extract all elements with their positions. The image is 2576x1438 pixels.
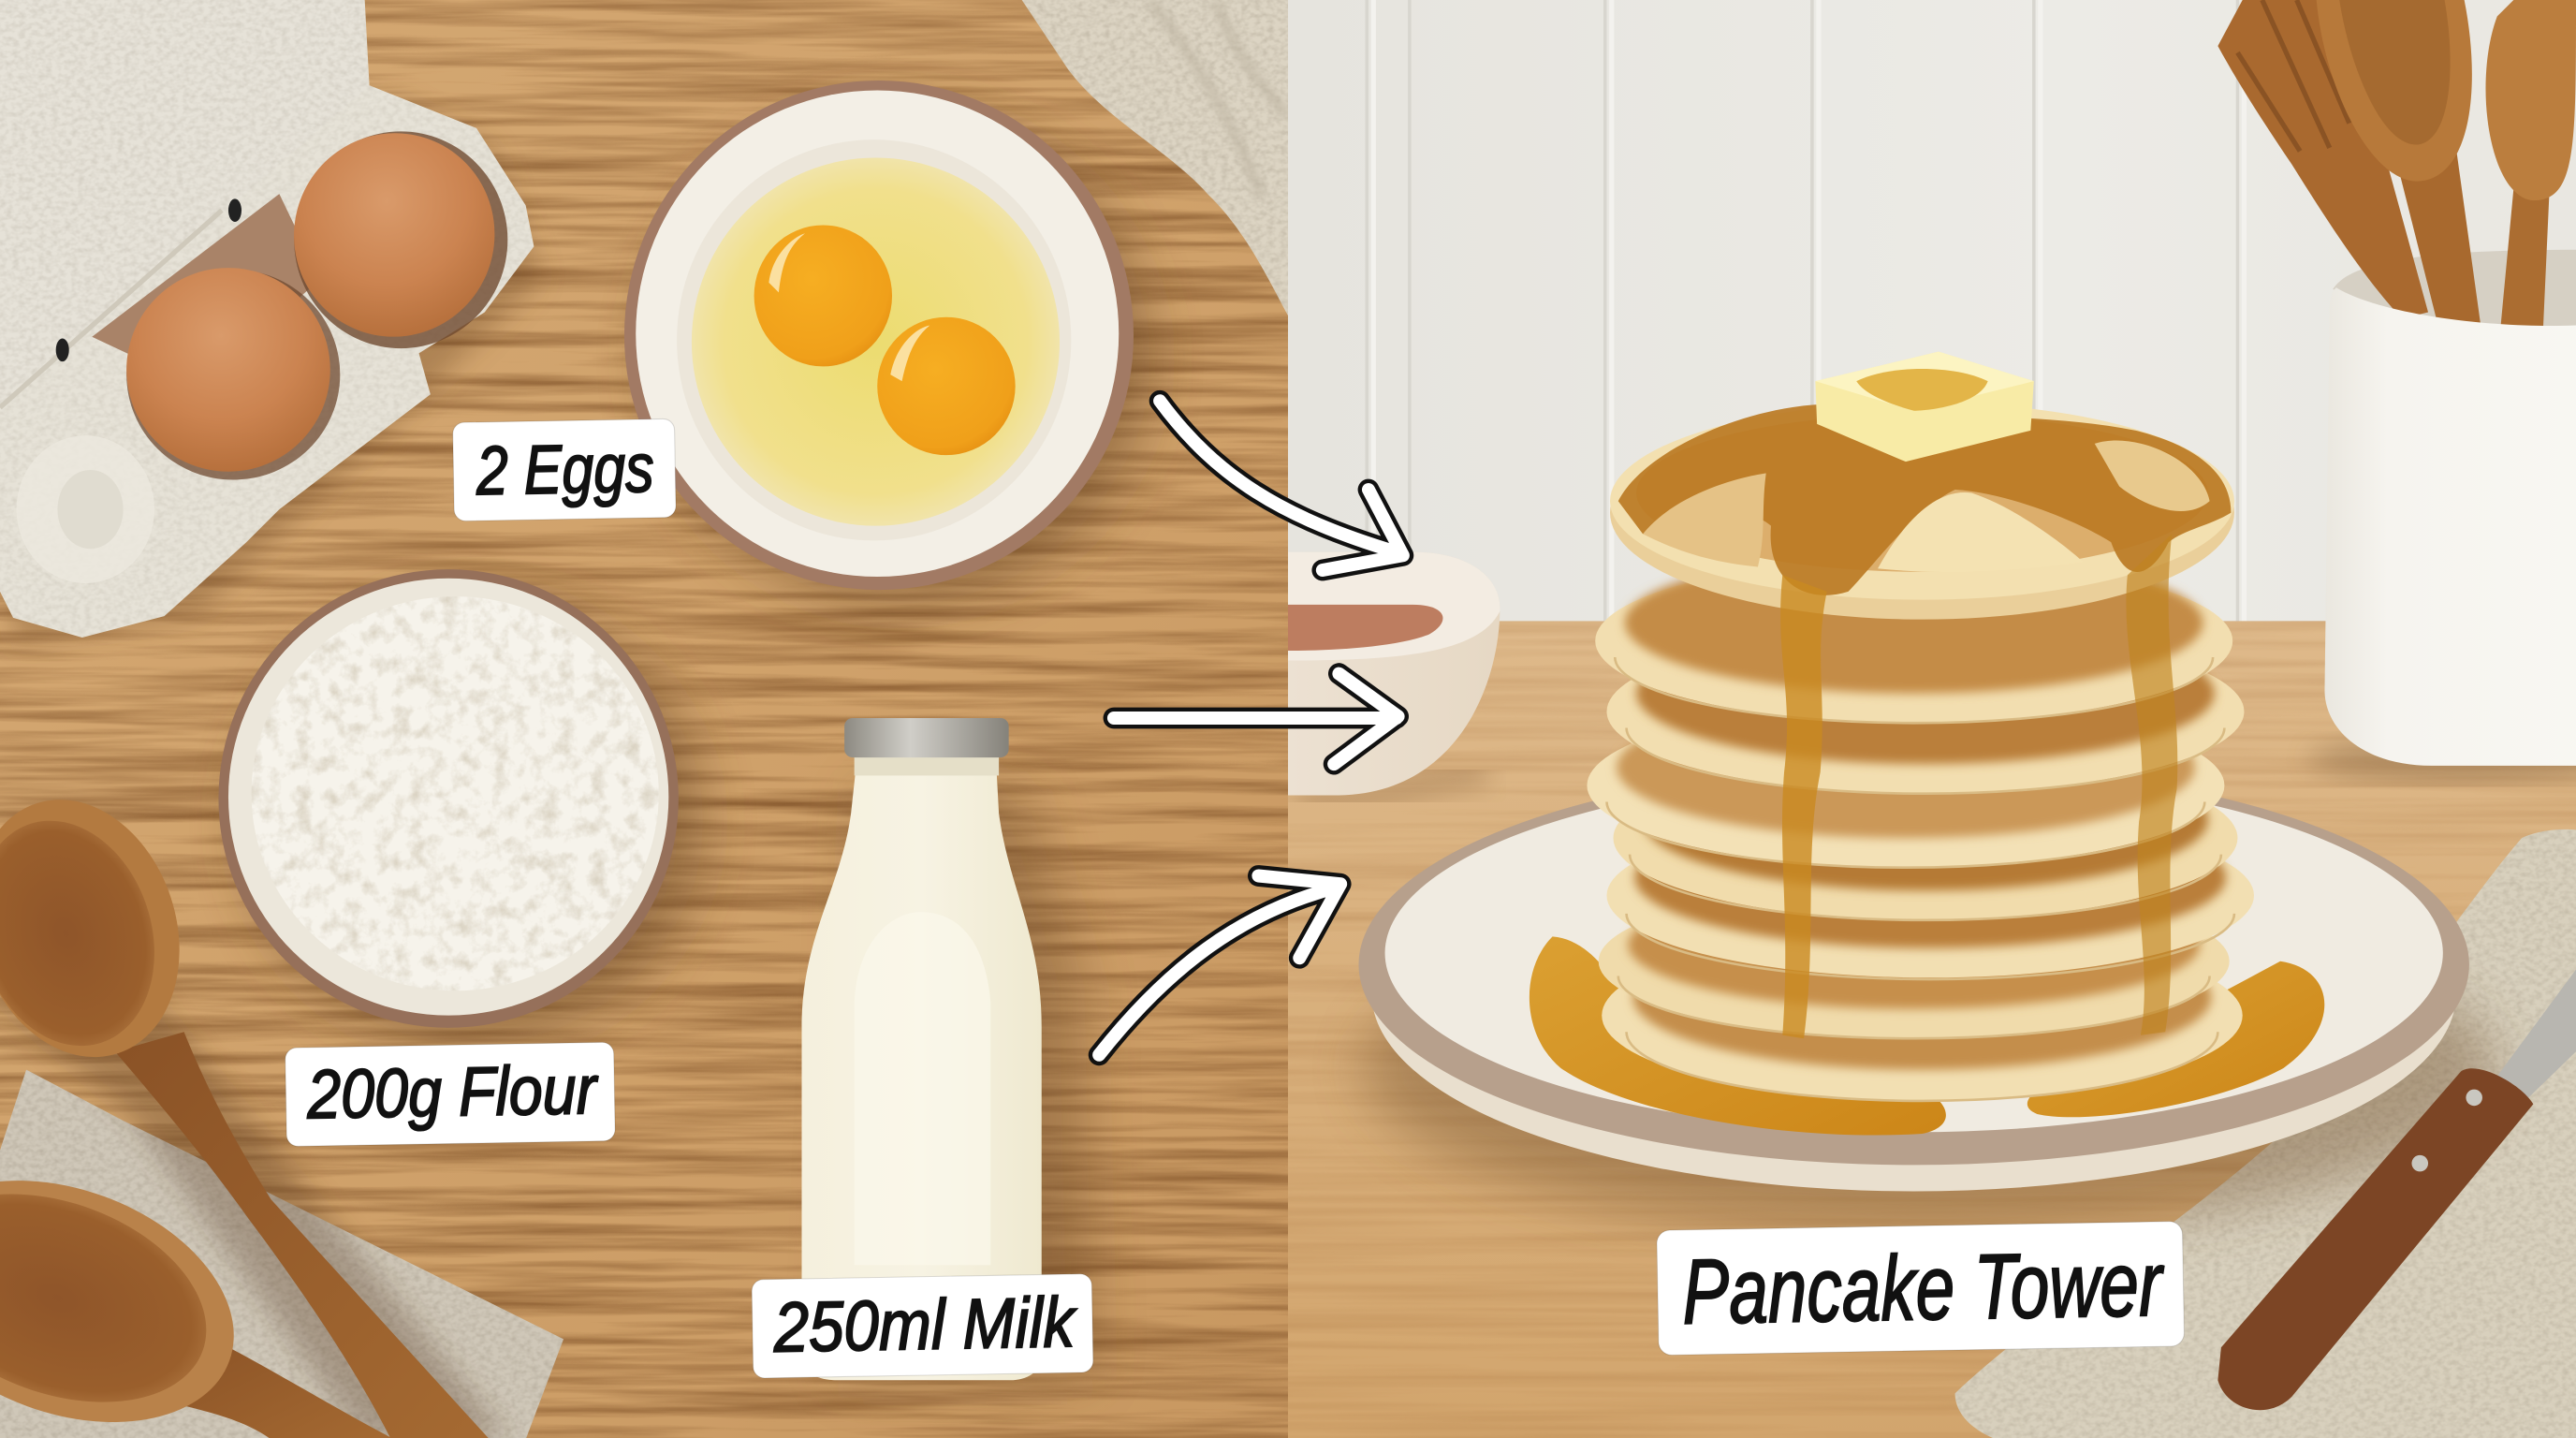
icon: wooden spoon, centre [2317,0,2481,326]
pancake stack [1587,403,2254,1101]
pancake 8: top [1610,403,2234,620]
syrup drip right [2126,534,2177,1035]
shadow: egg bowl [651,111,1150,605]
icon: white utensil cup [2324,287,2576,766]
syrup pool: right [2027,961,2324,1117]
shadow: cup [2308,736,2576,782]
icon: wooden spoon, right [2485,0,2576,329]
label: 2 Eggs: 2 Eggs [475,429,654,509]
cloth: top right [1022,0,1288,315]
icon: butter pat [1815,352,2034,462]
cup interior [2333,250,2576,337]
label: 2 Eggs [453,418,676,521]
syrup on top [1618,404,2231,595]
label: Pancake Tower [1657,1221,2185,1356]
label: Pancake Tower: Pancake Tower [1681,1232,2166,1343]
panel: ingredients on wood table [0,0,1288,1438]
icon: egg carton [0,0,542,644]
wood background [0,0,1288,1438]
icon: yolk 2 [877,317,1016,455]
icon: syrup bowl [1288,552,1500,800]
pancake 5 [1587,697,2224,868]
icon: upper wooden spoon [0,773,490,1438]
icon: yolk [754,225,892,366]
cloth: bottom right [1955,829,2576,1438]
arrow: eggs to pancakes [1160,401,1403,570]
pancake 6 [1606,623,2244,794]
syrup drip left [1780,575,1827,1038]
pancake 3 [1606,807,2254,979]
icon: egg, lower [126,268,330,472]
icon: lower wooden spoon [0,1137,394,1438]
icon: wooden fork [2217,0,2428,318]
pale patch right [2095,441,2210,511]
label: 200g Flour: 200g Flour [306,1050,600,1133]
syrup pool: left [1530,936,1946,1136]
pale wedge on top [1878,492,2083,572]
shadow: spoons [0,995,510,1438]
utensils in cup [2217,0,2576,329]
shadow: plate [1364,903,2497,1232]
pancake 7 [1595,552,2232,723]
arrow: flour to pancakes [1114,674,1398,764]
icon: flour bowl [218,569,679,1028]
wall panels [1288,0,2576,624]
pancake 4 [1614,749,2237,920]
arrow: milk to pancakes [1099,875,1340,1055]
shadow: milk bottle [838,788,1092,1380]
icon: egg, upper [294,133,494,337]
icon: plate [1358,764,2469,1191]
icon: fork with wooden handle [2217,970,2576,1410]
table [1288,621,2576,1438]
cloth: bottom left [0,1070,564,1438]
icon: milk bottle [801,718,1042,1380]
panel: finished pancake scene [1288,0,2576,1438]
shadow: flour bowl [243,598,703,1045]
pale patch left [1643,473,1766,567]
pancake 1 [1602,925,2243,1101]
pancake 2 [1599,881,2230,1038]
icon: egg bowl [624,81,1134,590]
label: 250ml Milk: 250ml Milk [772,1283,1077,1367]
